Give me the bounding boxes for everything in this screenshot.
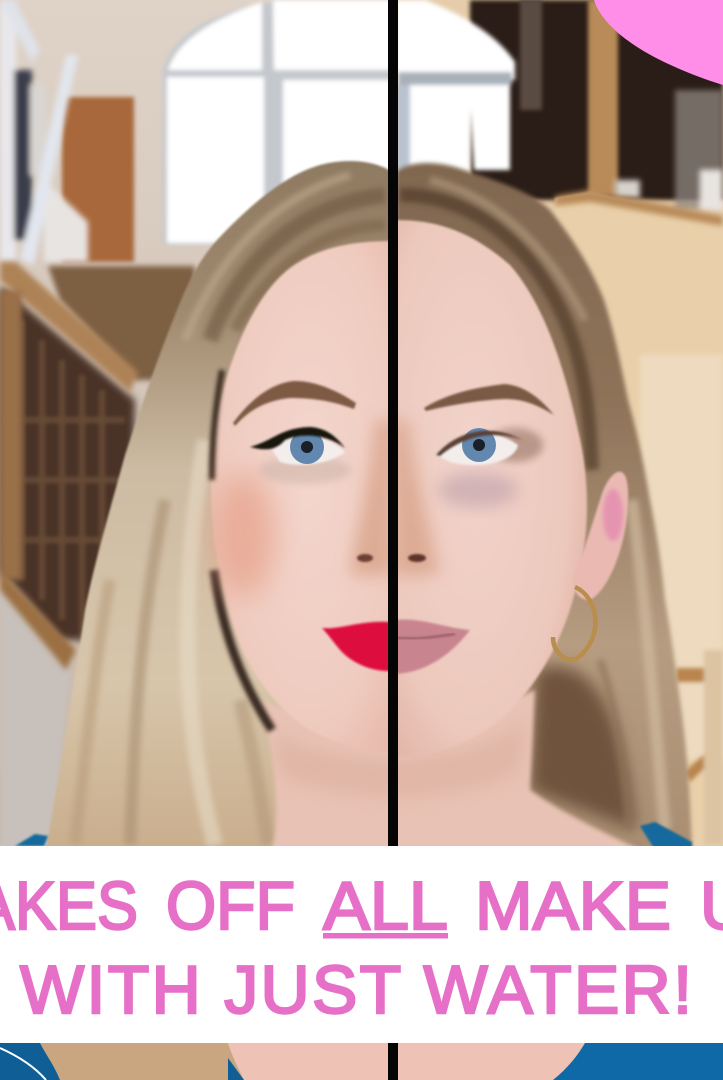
hair back right [396,163,692,850]
hoop earring [553,587,595,659]
stairs [48,266,195,380]
right bottom railing [676,650,723,845]
pink blob corner [594,0,723,85]
title: takes off all make up with just water: ALL [323,868,448,944]
white title banner [0,846,723,1043]
window right [396,0,542,240]
door panel lines [640,355,723,760]
neck shadow [275,720,525,797]
door [62,97,134,262]
shoulders blue [15,822,692,850]
left eye [250,427,351,484]
ear [573,472,628,600]
lattice railing [0,285,135,640]
white curve [0,1048,46,1080]
nostrils [357,554,426,562]
cream half wall [555,192,723,860]
hair back left [46,161,392,850]
hair shadow along left jaw [212,370,272,730]
hair strands right [400,180,665,830]
right eye [436,428,543,508]
black vertical divider [388,0,398,1080]
face right half [396,220,587,756]
nose shading [350,420,438,575]
red lips left [322,622,392,671]
wood post [588,0,618,196]
face left half [211,241,392,752]
title: takes off all make up with just water [0,868,723,1028]
title: takes off all make up with just water: WITH JUST WATER! [20,952,692,1028]
left eyebrow [233,381,356,426]
railing posts and white wall [0,0,88,265]
bottom photo strip [0,1043,723,1080]
hair strands left [75,175,385,845]
title: takes off all make up with just water: MAKE [475,868,671,944]
dark staircase [470,0,723,200]
blurred balusters [615,90,723,210]
window left [163,0,392,245]
right eyebrow [424,384,554,415]
left cheek blush [211,473,275,597]
nude lips right [396,619,470,674]
neck [262,690,640,850]
background: room left of divider [0,0,392,850]
title: takes off all make up with just water: OFF [166,868,295,944]
lower wall [0,575,72,850]
background: room right of divider [396,0,723,860]
